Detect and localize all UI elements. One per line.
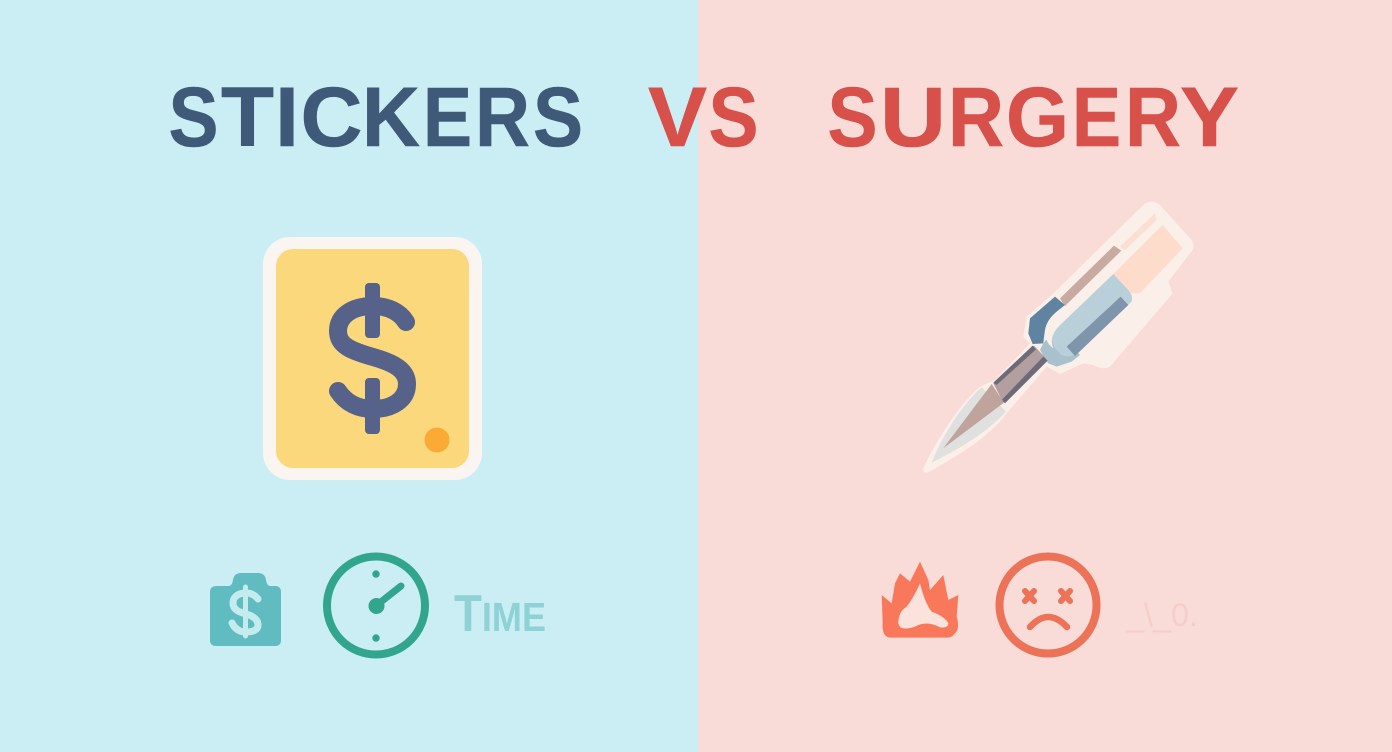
title: stickers: E [423, 70, 472, 164]
title: surgery: R [1125, 70, 1181, 164]
dollar sign [338, 283, 407, 434]
title: vs: V [648, 70, 707, 164]
blade [932, 387, 1006, 463]
right x eye [1061, 591, 1070, 601]
title: surgery: R [948, 70, 1004, 164]
white crescent [1046, 325, 1060, 348]
title: surgery: S [828, 70, 878, 164]
label: faded pain text: _\_0. [1125, 597, 1198, 633]
title: surgery: E [1072, 70, 1121, 164]
lower grip [1040, 327, 1080, 367]
sticker outline [923, 202, 1194, 472]
panel: stickers background [0, 0, 698, 752]
title: stickers: K [362, 70, 420, 164]
title: stickers: S [168, 70, 218, 164]
panel: surgery background [698, 0, 1392, 752]
title: vs: S [708, 70, 758, 164]
icon: dollar sticker [263, 237, 482, 480]
blue clip [1028, 297, 1065, 344]
title: stickers: I [275, 70, 299, 164]
frown [1030, 617, 1067, 627]
title: surgery: U [880, 70, 946, 164]
left x eye [1025, 591, 1034, 601]
label: time: TIME [454, 585, 546, 643]
icon: flame [882, 562, 958, 638]
shaft [993, 346, 1046, 403]
orange dot [424, 428, 450, 452]
title: surgery: G [1006, 70, 1069, 164]
icon: clock [327, 556, 425, 654]
title: stickers: S [533, 70, 583, 164]
title: surgery: Y [1180, 70, 1239, 164]
icon: money bag [210, 573, 281, 646]
metal grip [1052, 274, 1132, 356]
title: stickers: T [221, 70, 274, 164]
title: stickers: C [300, 70, 362, 164]
icon: sad face [1000, 556, 1096, 654]
title: stickers: R [475, 70, 530, 164]
icon: scalpel [923, 202, 1194, 472]
dollar glyph [232, 587, 258, 636]
handle end [1120, 213, 1157, 250]
taupe strip [1060, 246, 1121, 306]
